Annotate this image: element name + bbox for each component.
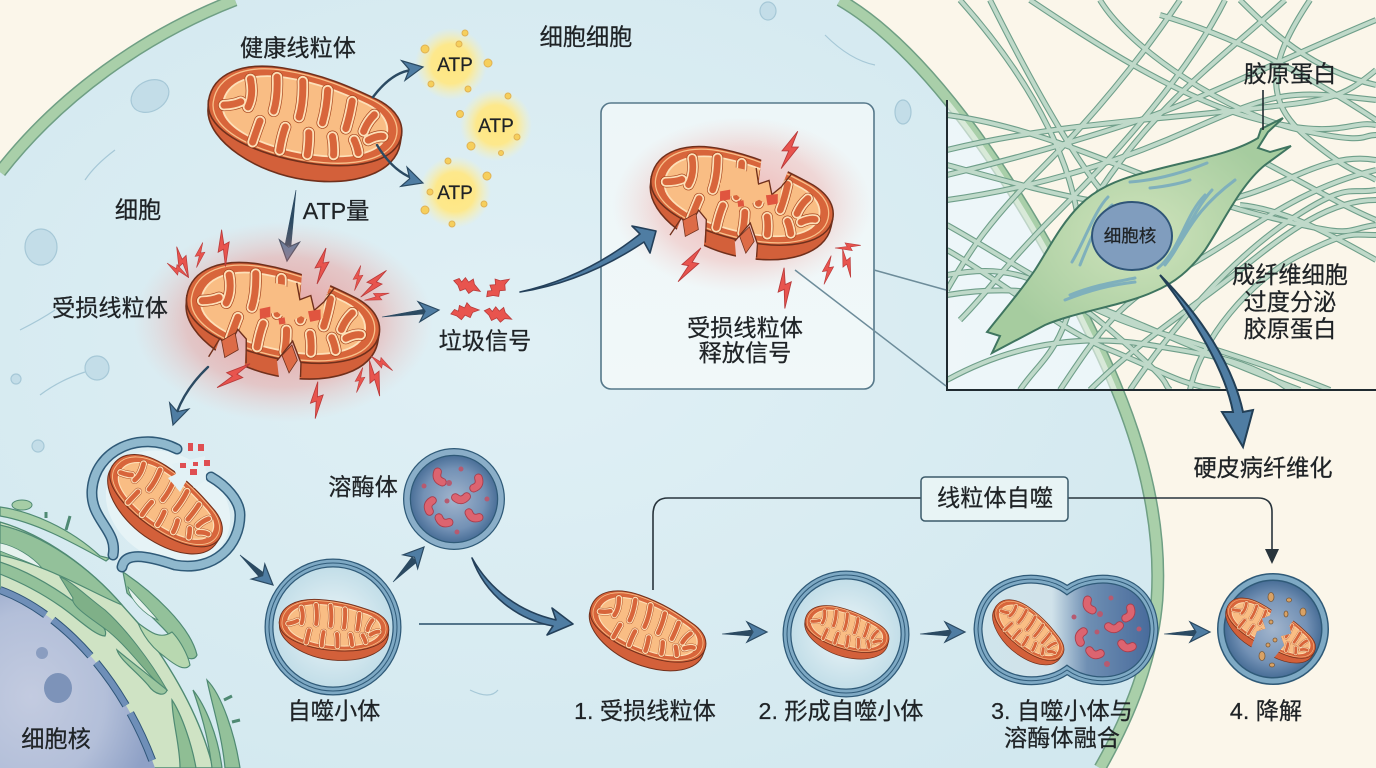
label: step 2: 2. 形成自噬小体 (759, 698, 923, 724)
label: step 3: 3. 自噬小体与 (991, 698, 1133, 724)
arrow: signal to inset (520, 226, 656, 292)
head: bracket arrow (1265, 549, 1279, 564)
arrow: health to damage (277, 190, 299, 262)
label: mitophagy box: 线粒体自噬 (937, 485, 1053, 511)
step 3 fusion (978, 579, 1154, 681)
label: step 3 (991, 698, 1133, 751)
arrow: step 2 to 3 (920, 622, 965, 642)
arrow: damage to phagophore (163, 367, 208, 428)
nucleus and ER (0, 500, 240, 768)
label: ATP middle: ATP (478, 116, 514, 137)
panel: damaged mitochondrion inset: 受损线粒体 (687, 315, 803, 341)
label: fibroblast nucleus: 细胞核 (1104, 226, 1156, 246)
arrow: step 3 to 4 (1164, 622, 1210, 642)
damaged mitochondrion (176, 253, 387, 392)
fibroblast cell (987, 118, 1291, 353)
inset axes (947, 100, 1376, 390)
label: fibroblast secretes collagen: 过度分泌 (1244, 289, 1336, 315)
arrow: step 1 to 2 (722, 622, 767, 642)
label: damaged mitochondrion: 受损线粒体 (52, 295, 168, 321)
label: step 4: 4. 降解 (1230, 698, 1302, 724)
step 1 mitochondrion (578, 581, 715, 684)
label: step 1: 1. 受损线粒体 (574, 698, 716, 724)
arrow: to danger signal (382, 300, 440, 322)
label: lysosome: 溶酶体 (328, 474, 398, 500)
callout lines (795, 270, 946, 386)
label: fibroblast secretes collagen: 胶原蛋白 (1244, 316, 1336, 342)
cytoplasm vesicles (11, 2, 911, 695)
label: fibroblast secretes collagen: 成纤维细胞 (1232, 262, 1348, 288)
arrow: to ATP top (373, 57, 425, 97)
label: ATP amount: ATP量 (303, 198, 369, 224)
label: mitophagy box (921, 477, 1068, 521)
step 2 autophagosome (787, 575, 905, 693)
collagen pointer line (1262, 90, 1264, 130)
healthy mitochondrion (199, 57, 409, 194)
panel: damaged mitochondrion inset (601, 103, 874, 389)
icon: danger signals (449, 272, 513, 323)
line: autophagosome to step 1 (419, 623, 555, 625)
phagophore (84, 427, 252, 587)
title: cell label: 细胞细胞 (540, 24, 632, 50)
ATP bursts (415, 28, 532, 228)
collagen fibers (947, 0, 1376, 390)
label: autophagosome: 自噬小体 (288, 698, 380, 724)
label: fibroblast secretes collagen (1232, 262, 1348, 342)
fibroblast background panel (948, 100, 1117, 389)
label: step 3: 溶酶体融合 (1004, 725, 1120, 751)
step 4 degradation (1216, 577, 1325, 681)
label: ATP top: ATP (437, 55, 473, 76)
autophagy bracket (653, 498, 1272, 590)
label: ATP bottom: ATP (437, 183, 473, 204)
lysosome (407, 452, 501, 546)
label: danger signal: 垃圾信号 (439, 328, 531, 354)
label: cell: 细胞 (115, 197, 161, 223)
arrow: fibroblast to fibrosis (1160, 275, 1253, 447)
panel: damaged mitochondrion inset: 释放信号 (699, 340, 791, 366)
arrow: lysosome to step 1 (472, 558, 573, 635)
bolts around damaged mitochondrion (164, 229, 396, 419)
label: healthy mitochondrion: 健康线粒体 (240, 35, 356, 61)
label: collagen: 胶原蛋白 (1244, 61, 1336, 87)
arrow: to ATP bottom (377, 145, 426, 193)
label: scleroderma fibrosis: 硬皮病纤维化 (1193, 455, 1333, 481)
autophagosome (269, 563, 397, 691)
glow: damaged mitochondrion (133, 222, 433, 422)
arrow: phagophore to autophagosome (240, 555, 280, 592)
label: nucleus: 细胞核 (21, 726, 91, 752)
arrow: autophagosome to lysosome (393, 540, 431, 582)
